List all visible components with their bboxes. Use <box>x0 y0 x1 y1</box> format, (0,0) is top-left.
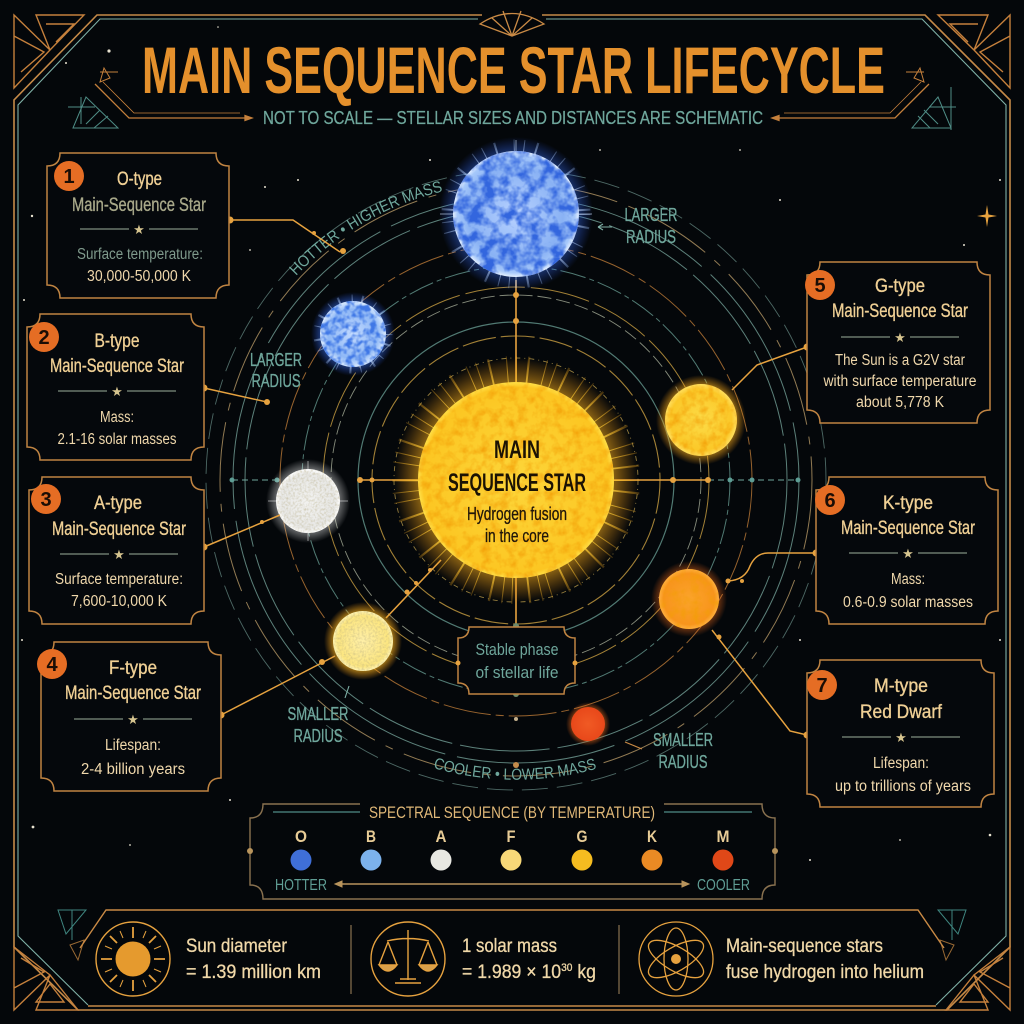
small radius arrows <box>345 224 642 749</box>
bottom fact band <box>80 910 944 996</box>
legend letters: M <box>716 827 730 846</box>
title ornament: right <box>772 68 929 120</box>
panel 7: M-type: M-type <box>874 676 928 697</box>
panel 3: A-type: Main-Sequence Star <box>52 519 187 540</box>
panel 7: M-type: Lifespan: <box>873 755 929 772</box>
badge 5: 5 <box>814 275 826 297</box>
panel 2: B-type: ★ <box>111 384 123 399</box>
orbit rings <box>206 170 826 790</box>
icon: sun <box>96 922 170 996</box>
panel 1: O-type: O-type <box>117 169 162 190</box>
label: larger radius top right <box>624 205 678 247</box>
label: smaller radius right: SMALLER <box>653 730 713 750</box>
label: larger radius left: RADIUS <box>252 371 300 391</box>
panel 3: A-type: A-type <box>94 493 142 514</box>
panel 3: A-type: 7,600-10,000 K <box>71 593 168 610</box>
panel 4: F-type <box>37 642 221 791</box>
panel 6: K-type <box>815 477 998 624</box>
panel 4: F-type: F-type <box>109 658 157 679</box>
panel 2: B-type: 2.1-16 solar masses <box>58 431 177 448</box>
fact: solar mass: = 1.989 × 10 <box>462 962 569 983</box>
panel 7: M-type <box>807 660 994 807</box>
panel 6: K-type: Mass: <box>891 571 925 588</box>
temperature arrow <box>335 881 689 887</box>
panel 4: F-type: ★ <box>127 712 139 727</box>
corner ornament: bottom left <box>14 947 78 1010</box>
badge 6: 6 <box>824 490 836 512</box>
star: B-type <box>311 292 395 376</box>
panel 4: F-type: 2-4 billion years <box>81 761 185 778</box>
panel 7: M-type: ★ <box>895 730 907 745</box>
panel 2: B-type: B-type <box>94 331 140 352</box>
panel 5: G-type: with surface temperature <box>823 373 976 390</box>
label: larger radius top right: RADIUS <box>626 227 676 247</box>
callout: stable phase: Stable phase <box>476 640 558 659</box>
starfield <box>21 26 1001 861</box>
legend letters: O <box>295 827 307 846</box>
legend swatches <box>290 850 734 870</box>
panel 5: G-type: Main-Sequence Star <box>832 301 969 322</box>
star description: Hydrogen fusion <box>467 504 567 524</box>
badge 2 <box>29 322 59 352</box>
curved label: hotter higher mass: HOTTER • HIGHER MASS <box>289 181 442 276</box>
divider <box>351 925 619 994</box>
badge 4 <box>37 649 67 679</box>
fact: sun diameter: Sun diameter <box>186 936 288 957</box>
panel 5: G-type: G-type <box>875 276 925 297</box>
panel 6: K-type: 0.6-0.9 solar masses <box>843 594 973 611</box>
badge 1: 1 <box>63 166 75 188</box>
cooler label: COOLER <box>697 877 750 894</box>
label: smaller radius left: SMALLER <box>288 704 348 724</box>
fact: sun diameter <box>186 936 321 983</box>
badge 2: 2 <box>38 327 50 349</box>
geometric ornament: lower right <box>938 910 966 960</box>
geometric ornament: lower left <box>58 910 86 960</box>
fact: fusion: Main-sequence stars <box>726 936 883 957</box>
fact: fusion: fuse hydrogen into helium <box>726 962 924 983</box>
subtitle: NOT TO SCALE — STELLAR SIZES AND DISTANCES ARE SCHEMATIC <box>263 108 763 128</box>
hotter label: HOTTER <box>275 877 327 894</box>
ornament: top fan <box>480 11 544 36</box>
star: A-type <box>266 459 350 543</box>
fact: solar mass: 30 <box>561 962 572 974</box>
label: larger radius left <box>250 350 302 391</box>
star description line two: in the core <box>485 526 549 546</box>
star: F-type <box>324 602 402 680</box>
geometric ornament: upper right teal <box>912 87 956 130</box>
corner ornament: bottom right <box>946 947 1010 1010</box>
legend letters: K <box>647 827 658 846</box>
panel 5: G-type: about 5,778 K <box>856 394 945 411</box>
panel 1: O-type <box>47 153 229 298</box>
panel 1: O-type: Surface temperature: <box>77 246 203 263</box>
fact: sun diameter: = 1.39 million km <box>186 962 321 983</box>
label: larger radius top right: LARGER <box>624 205 678 225</box>
panel 5: G-type <box>805 262 990 423</box>
panel 6: K-type: K-type <box>883 493 933 514</box>
badge 6 <box>815 485 845 515</box>
panel 5: G-type: The Sun is a G2V star <box>835 352 965 369</box>
icon: balance scale <box>371 922 445 996</box>
title ornament: left <box>95 68 252 120</box>
callout: stable phase <box>456 627 578 694</box>
fact: solar mass: kg <box>572 962 596 983</box>
legend title: SPECTRAL SEQUENCE (BY TEMPERATURE) <box>369 803 655 822</box>
label: smaller radius left: RADIUS <box>294 726 342 746</box>
fact: solar mass: 1 solar mass <box>462 936 557 957</box>
panel 7: M-type: Red Dwarf <box>860 702 943 723</box>
central main sequence star <box>394 358 638 602</box>
legend letters: G <box>576 827 588 846</box>
label: smaller radius left <box>288 704 348 746</box>
label: smaller radius right <box>653 730 713 772</box>
badge 4: 4 <box>46 654 58 676</box>
legend letters: F <box>506 827 516 846</box>
badge 3 <box>31 484 61 514</box>
fact: fusion <box>726 936 924 983</box>
fact: solar mass <box>462 936 596 983</box>
panel 1: O-type: 30,000-50,000 K <box>87 268 192 285</box>
corner ornament: top right <box>938 15 1010 88</box>
star: G-type <box>656 375 746 465</box>
badge 7 <box>807 670 837 700</box>
legend letters <box>295 827 730 846</box>
star heading: MAIN <box>494 436 540 464</box>
star heading line two: SEQUENCE STAR <box>448 469 586 497</box>
panel 5: G-type: ★ <box>894 330 906 345</box>
icon: sparkle <box>977 205 997 227</box>
panel 2: B-type: Main-Sequence Star <box>50 356 185 377</box>
panel 4: F-type: Main-Sequence Star <box>65 683 202 704</box>
panel 2: B-type <box>27 314 204 460</box>
icon: atom <box>639 922 713 996</box>
star: O-type <box>439 137 593 291</box>
panel 6: K-type: ★ <box>902 546 914 561</box>
badge 7: 7 <box>816 675 828 697</box>
panel 4: F-type: Lifespan: <box>105 737 161 754</box>
panel 1: O-type: ★ <box>133 222 145 237</box>
panel 2: B-type: Mass: <box>100 409 134 426</box>
legend letters: A <box>436 827 446 846</box>
star: K-type <box>651 561 727 637</box>
label: larger radius left: LARGER <box>250 350 302 370</box>
badge 5 <box>805 270 835 300</box>
badge 3: 3 <box>40 489 52 511</box>
panel 3: A-type <box>29 477 204 624</box>
axis lines from central star <box>230 280 800 768</box>
badge 1 <box>54 161 84 191</box>
panel 3: A-type: ★ <box>113 547 125 562</box>
panel 3: A-type: Surface temperature: <box>55 571 183 588</box>
side knobs <box>247 848 778 854</box>
legend letters: B <box>366 827 376 846</box>
panel 6: K-type: Main-Sequence Star <box>841 518 976 539</box>
geometric ornament: upper left teal <box>68 97 118 128</box>
panel 1: O-type: Main-Sequence Star <box>72 195 207 216</box>
panel 7: M-type: up to trillions of years <box>835 778 971 795</box>
corner ornament: top left <box>14 15 84 88</box>
label: smaller radius right: RADIUS <box>658 752 708 772</box>
curved label: cooler lower mass: COOLER • LOWER MASS <box>434 758 596 780</box>
callout: stable phase: of stellar life <box>476 663 558 682</box>
connector lines <box>200 216 820 738</box>
spectral sequence legend <box>247 803 778 899</box>
star: M-type <box>566 702 610 746</box>
